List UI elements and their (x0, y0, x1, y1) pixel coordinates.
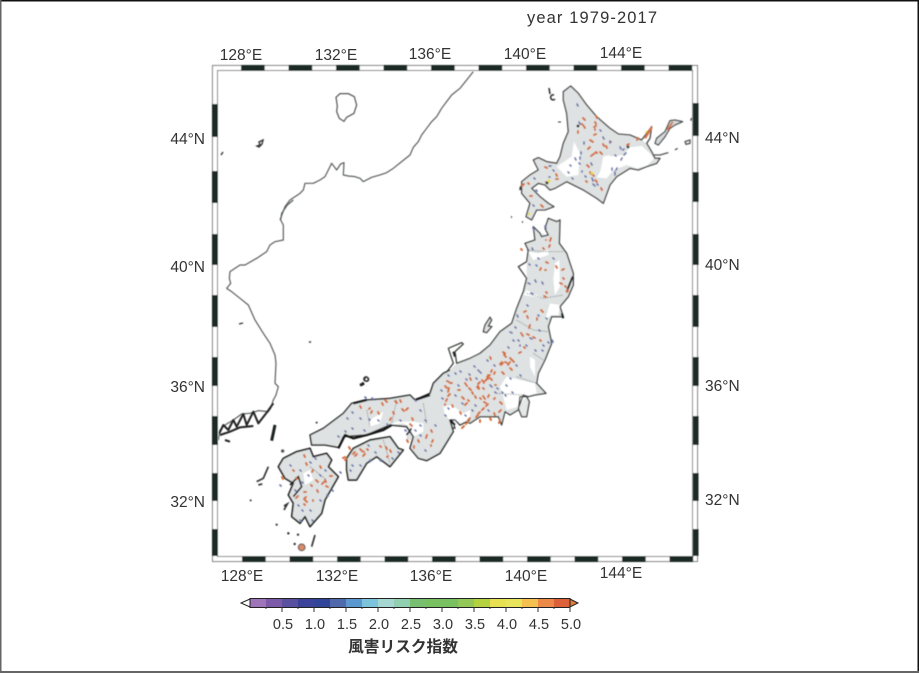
top longitude labels: 128°E (220, 47, 262, 64)
island: Sado (483, 317, 492, 333)
map: all land, coastlines and markers (218, 72, 692, 551)
color scale bar (241, 598, 581, 633)
left latitude labels: 36°N (170, 379, 205, 396)
small islands of the Sea of Japan (221, 88, 561, 385)
scale end arrow: high (570, 599, 578, 607)
right latitude labels: 32°N (705, 492, 740, 509)
bottom longitude labels: 144°E (600, 565, 642, 582)
scale tick labels: 2.0 (369, 617, 389, 633)
scale tick labels: 1.5 (337, 617, 357, 633)
wind risk markers: orange high-risk cells (282, 116, 638, 505)
wind risk markers: blue lower-risk cells (280, 104, 626, 521)
scale end arrow: low (241, 599, 250, 607)
right latitude labels: 44°N (705, 130, 740, 147)
left latitude labels: 32°N (170, 494, 205, 511)
map: continental coastline (218, 72, 473, 442)
scale tick labels (273, 617, 581, 633)
scale color segments (250, 598, 570, 608)
map: northeast and central Honshu (407, 218, 573, 440)
scale tick labels: 2.5 (401, 617, 421, 633)
left latitude labels: 44°N (170, 131, 205, 148)
title: year range: year 1979-2017 (527, 9, 657, 27)
scale tick labels: 5.0 (561, 617, 581, 633)
left latitude labels (170, 131, 205, 511)
scale tick labels: 4.0 (497, 617, 517, 633)
scale tick labels: 1.0 (305, 617, 325, 633)
yellow and green marker highlights (528, 125, 647, 215)
scale tick labels: 4.5 (529, 617, 549, 633)
right latitude labels (705, 130, 740, 509)
scale title: 風害リスク指数 (348, 637, 458, 656)
bottom longitude labels: 140°E (505, 568, 547, 585)
map: Hokkaido (522, 86, 660, 220)
top longitude labels: 132°E (315, 47, 357, 64)
left latitude labels: 40°N (170, 259, 205, 276)
scale tick labels: 3.0 (433, 617, 453, 633)
top longitude labels: 144°E (600, 45, 642, 62)
bottom longitude labels: 136°E (410, 568, 452, 585)
bottom longitude labels (221, 565, 642, 585)
island: Ulleungdo outline (336, 94, 357, 121)
top longitude labels: 140°E (504, 46, 546, 63)
scale tick labels: 0.5 (273, 617, 293, 633)
top longitude labels (220, 45, 642, 64)
bottom longitude labels: 128°E (221, 568, 263, 585)
islands: Kuriles (653, 118, 692, 155)
map: western Honshu, Shikoku, Kyushu (250, 370, 470, 551)
bottom longitude labels: 132°E (316, 568, 358, 585)
top longitude labels: 136°E (409, 46, 451, 63)
right latitude labels: 36°N (705, 378, 740, 395)
map frame with graduated border (212, 65, 698, 562)
right latitude labels: 40°N (705, 257, 740, 274)
scale tick labels: 3.5 (465, 617, 485, 633)
